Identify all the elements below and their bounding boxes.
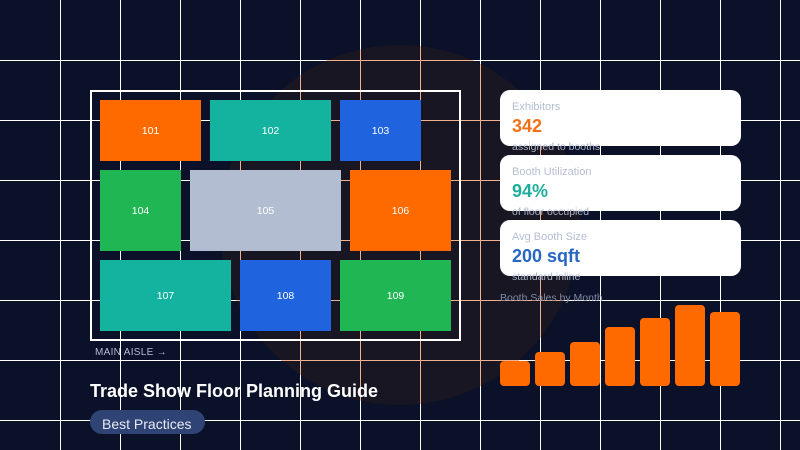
- booth 105: [190, 170, 341, 251]
- value: 94%: [512, 181, 548, 201]
- background circle: [222, 45, 580, 405]
- title: Trade Show Floor Planning Guide: [90, 381, 378, 401]
- booth 108: 108: [277, 290, 294, 302]
- value: 200 sqft: [512, 246, 580, 266]
- label: Exhibitors: [512, 101, 560, 113]
- booth 107: [100, 260, 231, 331]
- booth 102: [210, 100, 331, 161]
- booth 109: 109: [387, 290, 404, 302]
- stat card: average booth size: [500, 220, 741, 276]
- booth 106: 106: [392, 204, 409, 216]
- value: 342: [512, 116, 542, 136]
- booth 104: 104: [132, 204, 149, 216]
- panel: floor plan: [90, 90, 461, 341]
- stat card: exhibitors: [500, 90, 741, 146]
- booth 103: [340, 100, 421, 161]
- booth 101: [100, 100, 201, 161]
- note: of floor occupied: [512, 206, 589, 218]
- label: Avg Booth Size: [512, 231, 587, 243]
- note: standard inline: [512, 271, 580, 283]
- booth 101: 101: [142, 124, 159, 136]
- main aisle label: MAIN AISLE →: [95, 347, 167, 358]
- booth 105: 105: [257, 204, 274, 216]
- booth 104: [100, 170, 181, 251]
- booth 106: [350, 170, 451, 251]
- booth 108: [240, 260, 331, 331]
- label: Booth Utilization: [512, 166, 592, 178]
- booth 103: 103: [372, 124, 389, 136]
- bar chart: booth sales by month: [500, 305, 740, 386]
- booth 109: [340, 260, 451, 331]
- note: assigned to booths: [512, 141, 600, 153]
- badge: best practices: Best Practices: [102, 416, 191, 432]
- chart heading: Booth Sales by Month: [500, 292, 603, 304]
- stat card: booth utilization: [500, 155, 741, 211]
- badge: best practices: [90, 410, 205, 434]
- booth 107: 107: [157, 290, 174, 302]
- booth 102: 102: [262, 124, 279, 136]
